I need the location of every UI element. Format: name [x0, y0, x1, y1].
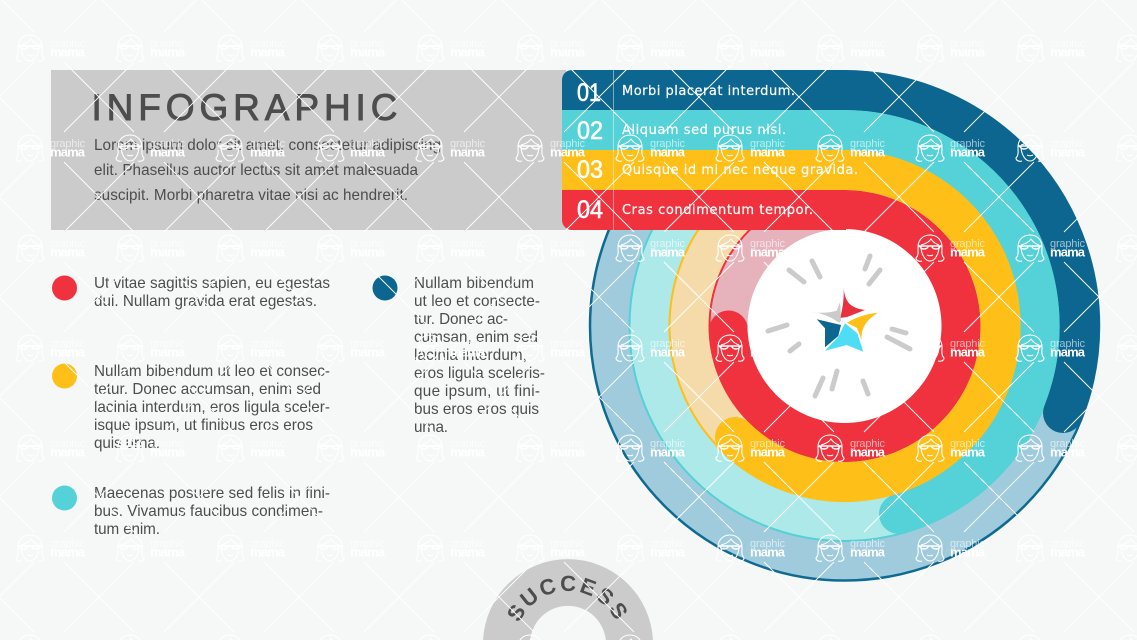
legend item: dark blue: que ipsum, ut fini-	[414, 383, 540, 400]
legend item: red: Ut vitae sagittis sapien, eu egestas	[94, 275, 330, 292]
legend item: dark blue: cumsan, enim sed	[414, 329, 538, 346]
badge: success: SUCCESS	[508, 576, 627, 621]
legend item: dark blue: lacinia interdum,	[414, 347, 527, 364]
intro text: suscipit. Morbi pharetra vitae nisi ac hendrerit.	[94, 187, 408, 204]
intro text	[94, 137, 441, 204]
legend item: dark blue: eros ligula sceleris-	[414, 365, 545, 382]
legend item: teal	[52, 485, 330, 538]
bar: 01: Morbi placerat interdum.	[622, 84, 795, 99]
bar: 03: Quisque id mi nec neque gravida.	[622, 163, 858, 178]
intro text: Lorem ipsum dolor sit amet, consectetur adipiscing	[94, 137, 441, 154]
bar: 02	[562, 110, 846, 150]
bar: 04: Cras condimentum tempor.	[622, 203, 813, 218]
legend item: teal: Maecenas posuere sed felis in fini-	[94, 485, 330, 502]
icon: star with sparks	[768, 256, 910, 396]
legend item: yellow: Nullam bibendum ut leo et consec-	[94, 363, 330, 380]
legend item: dark blue: tur. Donec ac-	[414, 311, 508, 328]
legend item: red: dui. Nullam gravida erat egestas.	[94, 293, 317, 310]
bar: 03	[562, 150, 858, 190]
legend item: yellow: isque ipsum, ut finibus eros eros	[94, 417, 313, 434]
legend item: dark blue: urna.	[414, 419, 448, 436]
legend item: red	[52, 275, 330, 310]
legend item: yellow	[52, 363, 330, 452]
legend item: yellow: lacinia interdum, eros ligula sceler-	[94, 399, 330, 416]
chart: concentric progress rings	[590, 72, 1099, 580]
legend item: yellow: quis urna.	[94, 435, 160, 452]
legend item: dark blue: bus eros eros quis	[414, 401, 539, 418]
legend item: dark blue: ut leo et consecte-	[414, 293, 540, 310]
bar: 04: 04	[577, 196, 603, 224]
bar: 01: 01	[577, 79, 601, 107]
bar: 03: 03	[577, 156, 603, 184]
bar: 01	[562, 70, 846, 110]
title: INFOGRAPHIC	[92, 87, 402, 128]
bar: 02: 02	[577, 117, 603, 145]
bar: 04	[562, 190, 846, 230]
legend item: dark blue	[372, 275, 545, 436]
bar: 02: Aliquam sed purus nisi.	[622, 123, 786, 138]
legend item: teal: tum enim.	[94, 521, 160, 538]
legend item: yellow: tetur. Donec accumsan, enim sed	[94, 381, 321, 398]
panel: title block	[51, 70, 566, 230]
intro text: elit. Phasellus auctor lectus sit amet malesuada	[94, 162, 419, 179]
badge: success	[483, 559, 653, 640]
legend item: dark blue: Nullam bibendum	[414, 275, 534, 292]
legend item: teal: bus. Vivamus faucibus condimen-	[94, 503, 323, 520]
